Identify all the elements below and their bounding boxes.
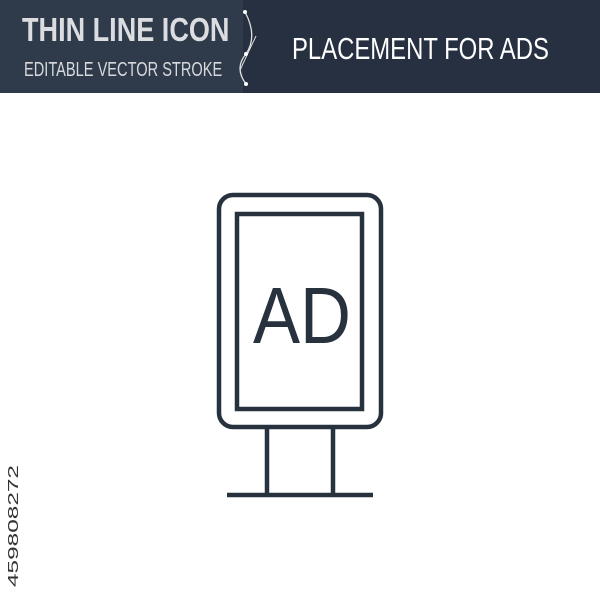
header banner <box>0 0 600 93</box>
subtitle: editable vector stroke: EDITABLE VECTOR STROKE <box>24 59 222 81</box>
heading: placement for ads: PLACEMENT FOR ADS <box>292 31 549 66</box>
title: thin line icon: THIN LINE ICON <box>22 11 229 48</box>
icon: ad billboard stand: AD <box>253 271 351 360</box>
icon: bezier curve <box>239 10 256 86</box>
stock id: 459808272 <box>5 465 22 587</box>
